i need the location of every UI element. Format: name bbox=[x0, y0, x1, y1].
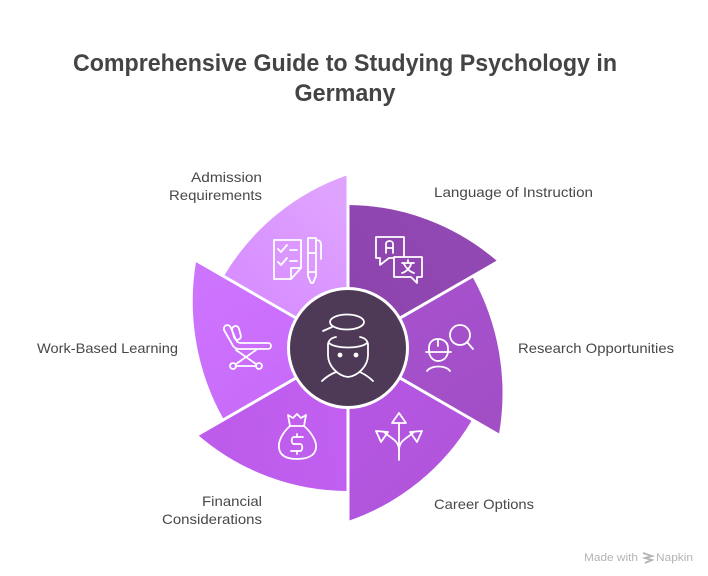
label: financial considerations bbox=[162, 493, 262, 527]
radial wheel bbox=[191, 170, 505, 526]
watermark: made with napkin: Made with bbox=[584, 552, 638, 564]
segment: admission requirements bbox=[224, 175, 348, 348]
watermark: made with napkin bbox=[584, 552, 693, 564]
icon: stretcher bed bbox=[224, 325, 271, 369]
label: admission requirements bbox=[169, 169, 262, 203]
icon: translation bubbles bbox=[376, 237, 422, 283]
watermark: made with napkin: Napkin bbox=[656, 552, 693, 564]
segment: work-based learning bbox=[193, 262, 348, 420]
icon: student head with halo bbox=[322, 314, 373, 381]
segment: career options bbox=[348, 348, 472, 521]
icon: diverging arrows bbox=[376, 413, 422, 460]
title: Comprehensive Guide to Studying Psychology in bbox=[73, 50, 617, 77]
icon: checklist and pen bbox=[274, 238, 321, 283]
label: career options: Career Options bbox=[434, 496, 534, 512]
segment: language of instruction bbox=[348, 205, 497, 348]
segment: financial considerations bbox=[198, 348, 348, 491]
label: financial considerations: Financial bbox=[202, 493, 262, 509]
label: work-based learning: Work-Based Learning bbox=[37, 340, 178, 356]
label: research opportunities: Research Opportunities bbox=[518, 340, 674, 356]
icon: researcher with magnifier bbox=[426, 325, 473, 371]
title bbox=[73, 50, 617, 107]
center circle bbox=[288, 288, 408, 408]
label: admission requirements: Admission bbox=[191, 169, 262, 185]
title: Germany bbox=[294, 80, 396, 107]
icon: money bag bbox=[279, 414, 316, 459]
label: admission requirements: Requirements bbox=[169, 187, 262, 203]
segment: research opportunities bbox=[348, 276, 503, 434]
label: language of instruction: Language of Instruction bbox=[434, 184, 593, 200]
label: financial considerations: Considerations bbox=[162, 511, 262, 527]
